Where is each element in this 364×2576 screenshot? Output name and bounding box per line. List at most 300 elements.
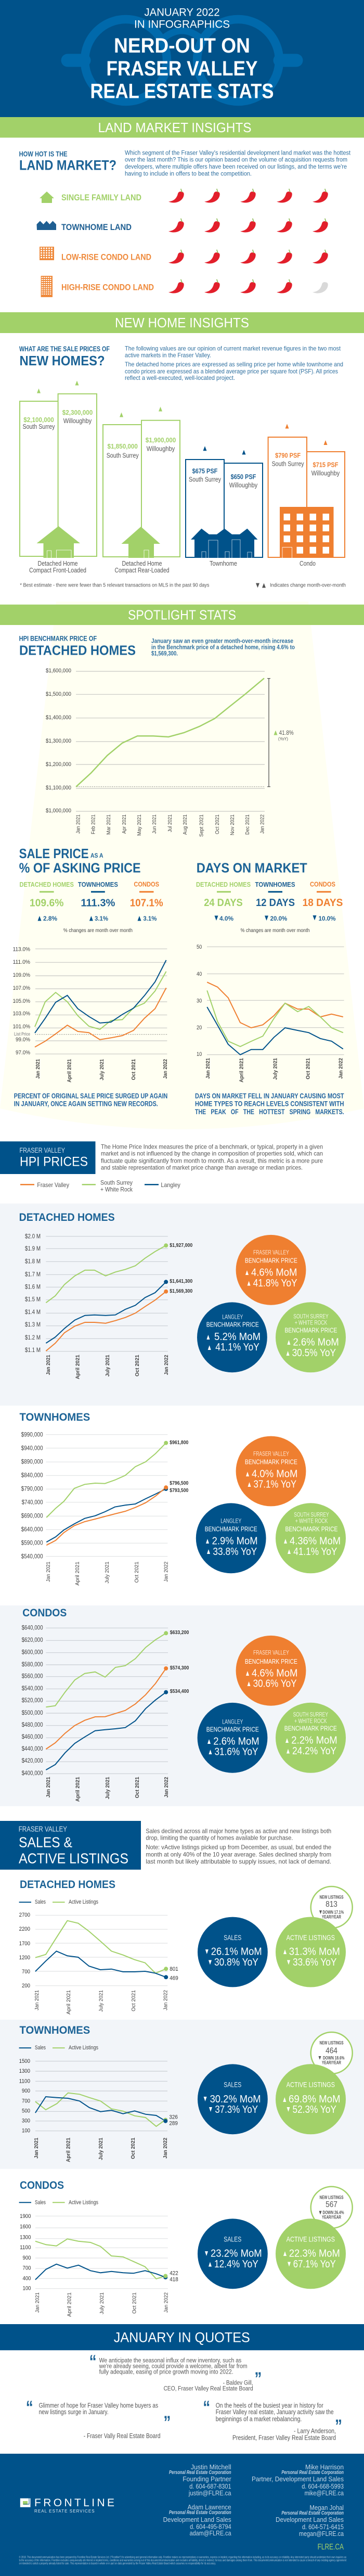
line chart: condo sales: 418 [170, 2276, 178, 2282]
quote: Larry Anderson: “ [203, 2398, 210, 2417]
bubble: fraser valley townhomes: FRASER VALLEY [253, 1451, 289, 1458]
line chart: detached sales: 2700 [19, 1912, 30, 1918]
contact: Megan Johal: Megan Johal [309, 2504, 344, 2511]
line chart: detached HPI: April 2021 [75, 1355, 81, 1379]
line chart: detached sales: 801 [170, 1966, 178, 1972]
line chart: sale price as % of asking: 109.0% [12, 972, 30, 978]
line chart: detached HPI: $1.9 M [25, 1246, 41, 1252]
line chart: condo HPI: $600,000 [22, 1650, 43, 1656]
bubble: active listings townhomes: ACTIVE LISTINGS [287, 2081, 335, 2089]
panel: sales condos: CONDOS [20, 2179, 64, 2191]
line chart: detached benchmark price: $1,200,000 [46, 761, 71, 768]
line chart: detached HPI: $2.0 M [25, 1233, 41, 1240]
contact: Adam Lawrence: Adam Lawrence [188, 2503, 231, 2511]
heading: detached homes benchmark: HPI BENCHMARK PRICE OF [19, 635, 97, 642]
stats: sale price by home type: 107.1% [130, 898, 163, 909]
quote: Fraser Valley Real Estate Board: ” [163, 2413, 171, 2432]
panel heading: sales and active listings [0, 1821, 141, 1870]
heading: land market: LAND MARKET? [19, 157, 116, 173]
logo: frontline [20, 2497, 114, 2514]
line chart: detached sales: April 2021 [66, 1990, 72, 2014]
bubble: langley townhomes: 2.9% MoM [212, 1536, 258, 1547]
text: new homes intro: The detached home prices are expressed as selling price per home while townhome and [125, 361, 343, 368]
quote: Baldev Gill: CEO, Fraser Valley Real Estate Board [164, 2384, 253, 2392]
bubble: sales detached: 30.8% YoY [214, 1957, 258, 1968]
contact: Megan Johal [276, 2504, 344, 2537]
legend: condo sales and listings [19, 2199, 98, 2205]
section band: new home insights: NEW HOME INSIGHTS [115, 315, 249, 330]
title: FRASER VALLEY [106, 57, 258, 80]
bubble: sales townhomes: 30.2% MoM [210, 2094, 261, 2105]
line chart: sale price as % of asking: 113.0% [12, 946, 30, 952]
rating row: low-rise condo land [40, 247, 328, 263]
line chart: detached benchmark price [46, 668, 294, 837]
line chart: detached benchmark price: $1,000,000 [46, 808, 71, 814]
line chart: condo HPI: April 2021 [75, 1777, 81, 1802]
bubble: langley detached: 5.2% MoM [214, 1331, 261, 1343]
line chart: condo sales: 422 [170, 2270, 178, 2276]
bubble: south surrey condos: SOUTH SURREY [293, 1712, 328, 1718]
line chart: detached benchmark price: Apr 2021 [121, 814, 127, 834]
line chart: days on market: Oct 2021 [306, 1058, 311, 1079]
footnotes [20, 583, 346, 588]
legend: sales and listings: Active Listings [69, 1899, 98, 1905]
legend: HPI regions: Fraser Valley [37, 1181, 69, 1189]
line chart: sale price as % of asking: April 2021 [67, 1059, 73, 1082]
bubble: langley townhomes [196, 1503, 266, 1573]
footnotes: Indicates change month-over-month [270, 583, 346, 588]
line chart: condo HPI: $640,000 [22, 1625, 43, 1631]
legend: sales and listings [19, 1899, 98, 1905]
bubble: active listings townhomes: 69.8% MoM [289, 2094, 341, 2105]
panel: HPI townhomes [20, 1411, 346, 1586]
text: new homes intro: active markets in the Fraser Valley. [125, 351, 211, 359]
rating row: townhome land: TOWNHOME LAND [61, 222, 132, 232]
bar group: detached front-loaded [20, 381, 97, 558]
line chart: condo HPI: $460,000 [22, 1734, 43, 1740]
line chart: townhome sales: 1300 [19, 2068, 30, 2074]
rating row: townhome land [36, 219, 328, 232]
stats: sale price by home type: DETACHED HOMES [19, 881, 74, 888]
spotlight background [0, 602, 364, 1129]
bubble: langley condos [198, 1703, 267, 1773]
bubble: new listings detached: DOWN 17.1% [322, 1909, 344, 1915]
legend: condo sales and listings: Sales [35, 2199, 46, 2205]
line chart: days on market: 20 [197, 1025, 202, 1031]
bubble: active listings condos [276, 2218, 346, 2289]
line chart: townhome HPI: $690,000 [21, 1513, 43, 1520]
line chart: townhome HPI: $961,800 [170, 1440, 189, 1446]
bar chart category labels: Compact Front-Loaded [29, 567, 86, 574]
line chart: condo sales: July 2021 [99, 2292, 105, 2314]
stats: sale price by home type: 3.1% [143, 915, 157, 922]
stats: days on market by home type: CONDOS [310, 881, 335, 888]
text: sales intro: month at only 40% of the 10 year average. Sales declined sharply from [146, 1851, 331, 1858]
line chart: condo sales: 700 [23, 2265, 31, 2271]
quote: Larry Anderson: beginnings of a market rebalancing. [216, 2415, 302, 2422]
line chart: detached HPI: $1,927,000 [170, 1243, 193, 1248]
line chart: detached benchmark price: May 2021 [136, 814, 142, 836]
bubble: new listings townhomes: YEAR/YEAR [322, 2060, 341, 2065]
section band: new home insights [0, 312, 364, 333]
panel: HPI townhomes: TOWNHOMES [20, 1411, 90, 1423]
legend: townhome sales and listings [19, 2045, 98, 2051]
bubble: fraser valley condos [236, 1636, 306, 1706]
contact: Justin Mitchell: Founding Partner [183, 2475, 231, 2483]
line chart: detached sales: Oct 2021 [131, 1990, 137, 2011]
bar group: townhome [186, 446, 263, 558]
bubble: south surrey townhomes: SOUTH SURREY [294, 1512, 329, 1519]
line chart: townhome HPI [21, 1432, 189, 1586]
stats: days on market by home type: 10.0% [318, 915, 336, 922]
line chart: detached benchmark price: Feb 2021 [90, 814, 97, 834]
bar chart category labels [29, 560, 316, 574]
contact: Mike Harrison: Partner, Development Land Sales [252, 2475, 344, 2483]
quote: Baldev Gill: - Baldev Gill, [223, 2379, 253, 2386]
text: sales intro: Note: vActive listings picked up from December, as usual, but ended the [146, 1843, 331, 1851]
legend: HPI regions: + White Rock [100, 1185, 133, 1193]
line chart: detached sales: 2200 [19, 1926, 30, 1932]
line chart: detached benchmark price: Jan 2022 [259, 814, 265, 834]
bubble: langley condos: LANGLEY [222, 1719, 243, 1726]
line chart: detached HPI: $1.4 M [25, 1309, 41, 1316]
line chart: townhome sales [19, 2058, 178, 2162]
line chart: detached sales: Jan 2021 [34, 1990, 40, 2010]
line chart: townhome sales: 500 [22, 2108, 30, 2114]
panel: HPI condos: CONDOS [22, 1607, 67, 1619]
contact: Mike Harrison: d. 604-668-5993 [302, 2482, 344, 2490]
caption: sale price [14, 1092, 167, 1107]
bubble: sales condos: SALES [224, 2235, 241, 2243]
line chart: sale price as % of asking: 111.0% [12, 959, 30, 965]
line chart: townhome sales: July 2021 [98, 2137, 104, 2160]
line chart: detached sales: July 2021 [99, 1990, 104, 2012]
line chart: sale price as % of asking: 99.0% [16, 1037, 30, 1043]
panel: HPI detached homes [0, 1204, 364, 1406]
bubble: fraser valley townhomes: 4.0% MoM [252, 1469, 297, 1480]
bar group: detached rear-loaded [103, 407, 180, 558]
bubble: fraser valley condos: BENCHMARK PRICE [245, 1657, 297, 1665]
line chart: townhome sales: Oct 2021 [131, 2137, 136, 2159]
panel: sales condos [19, 2179, 353, 2317]
line chart: townhome HPI: $793,500 [170, 1488, 189, 1494]
panel: sales townhomes: TOWNHOMES [20, 2024, 90, 2036]
quote: Baldev Gill: we're already seeing, could provide a welcome, albeit far from [99, 2363, 248, 2370]
bubble: new listings condos: YEAR/YEAR [322, 2215, 341, 2220]
text: sales intro: last month but likely attributable to supply issues, not lack of demand. [146, 1858, 331, 1865]
bubble: new listings detached: NEW LISTINGS [319, 1895, 343, 1900]
stats: days on market by home type: DETACHED HOMES [196, 881, 251, 888]
line chart: days on market: 40 [197, 971, 202, 977]
line chart: detached HPI: Jan 2021 [46, 1355, 51, 1375]
text: new homes intro: The following values are our opinion of current market revenue figures in the two most [125, 345, 341, 352]
bubble: fraser valley townhomes [236, 1436, 306, 1506]
heading: days on market: DAYS ON MARKET [197, 860, 307, 875]
bubble: active listings condos: ACTIVE LISTINGS [287, 2235, 335, 2243]
stats: days on market by home type: % changes are month over month [240, 927, 310, 934]
stats: sale price by home type: CONDOS [134, 881, 159, 888]
bubble: fraser valley townhomes: BENCHMARK PRICE [245, 1458, 297, 1465]
line chart: detached HPI: $1,641,300 [170, 1279, 193, 1284]
line chart: condo HPI: $500,000 [22, 1710, 43, 1716]
panel: HPI condos [0, 1605, 364, 1806]
heading: sale price as % of asking: AS A [90, 852, 103, 859]
line chart: sale price as % of asking: 105.0% [12, 998, 30, 1004]
line chart: townhome HPI: Oct 2021 [134, 1561, 140, 1583]
line chart: townhome HPI: $890,000 [21, 1459, 43, 1465]
line chart: condo HPI: $440,000 [22, 1746, 43, 1752]
bubble: south surrey townhomes: + WHITE ROCK [295, 1519, 328, 1525]
text: sales intro [146, 1827, 331, 1865]
bubble: south surrey condos: 2.2% MoM [291, 1735, 337, 1746]
bubble: new listings condos [311, 2187, 353, 2228]
bar chart category labels: Condo [300, 560, 316, 567]
bar group: detached front-loaded: $2,300,000 [62, 409, 93, 416]
line chart: townhome sales: Jan 2021 [34, 2137, 40, 2159]
section band: land market insights [0, 117, 364, 137]
line chart: days on market: 50 [197, 944, 202, 950]
line chart: townhome sales: 700 [22, 2098, 30, 2104]
line chart: condo HPI: $560,000 [22, 1674, 43, 1680]
line chart: townhome sales: April 2021 [66, 2137, 72, 2162]
stats: days on market by home type: 18 DAYS [303, 897, 343, 909]
panel: sales detached homes [19, 1879, 353, 2014]
bubble: sales condos: 23.2% MoM [211, 2248, 262, 2260]
legend: condo sales and listings: Active Listings [69, 2199, 98, 2205]
bubble: south surrey condos: BENCHMARK PRICE [284, 1725, 337, 1732]
bar group: townhome: $650 PSF [231, 473, 256, 481]
line chart: townhome sales: Jan 2022 [163, 2137, 168, 2159]
line chart: detached benchmark price: 41.8% [279, 730, 294, 736]
bubble: active listings condos: 22.3% MoM [289, 2248, 340, 2260]
stats: sale price by home type: 111.3% [81, 898, 115, 909]
line chart: detached benchmark price: $1,100,000 [46, 785, 71, 791]
bar group: detached front-loaded: South Surrey [23, 423, 55, 430]
line chart: condo HPI: Oct 2021 [135, 1777, 140, 1798]
line chart: detached sales: 700 [22, 1969, 30, 1975]
line chart: condo HPI [22, 1625, 189, 1802]
title: NERD-OUT ON [114, 34, 250, 57]
heading: sale price as % of asking: % OF ASKING PRICE [19, 860, 141, 875]
quote: Baldev Gill: fully adequate, easing of price growth moving into 2022. [99, 2368, 233, 2376]
line chart: condo HPI: $620,000 [22, 1637, 43, 1643]
quote: Larry Anderson: President, Fraser Valley Real Estate Board [232, 2434, 336, 2441]
line chart: townhome sales: 326 [169, 2114, 178, 2120]
contact: Adam Lawrence: adam@FLRE.ca [190, 2529, 231, 2537]
bubble: new listings detached [311, 1886, 353, 1928]
line chart: condo sales: 400 [23, 2275, 31, 2281]
stats: sale price by home type: % changes are month over month [63, 927, 133, 934]
bar chart category labels: Townhome [210, 560, 237, 567]
line chart: condo HPI: $520,000 [22, 1698, 43, 1704]
line chart: detached sales: 1200 [19, 1955, 30, 1961]
line chart: sale price as % of asking: Jan 2022 [163, 1059, 168, 1079]
line chart: detached sales [19, 1912, 178, 2014]
bubble: sales condos [198, 2218, 268, 2289]
line chart: days on market [197, 944, 344, 1082]
line chart: condo sales: 1300 [20, 2235, 31, 2241]
line chart: condo HPI: $420,000 [22, 1758, 43, 1764]
text: HPI intro: market and is not influenced by the change in composition of properties sold, which can [101, 1150, 323, 1157]
line chart: townhome HPI: $790,000 [21, 1486, 43, 1493]
bubble: new listings detached: YEAR/YEAR [322, 1915, 341, 1920]
line chart: condo sales: 900 [23, 2255, 31, 2261]
bar group: detached rear-loaded: Willoughby [147, 445, 175, 452]
stats: days on market by home type: 24 DAYS [204, 897, 243, 909]
panel: sales townhomes [0, 2020, 364, 2169]
bar group: detached rear-loaded: $1,850,000 [107, 443, 138, 450]
line chart: townhome HPI: $990,000 [21, 1432, 43, 1438]
bubble: south surrey detached: SOUTH SURREY [293, 1314, 329, 1320]
bubble: south surrey detached: 30.5% YoY [292, 1347, 336, 1359]
rating row: high-rise condo land [41, 276, 328, 297]
bubble: active listings detached: ACTIVE LISTINGS [287, 1933, 335, 1942]
stats: sale price by home type [19, 881, 163, 934]
bubble: new listings townhomes: NEW LISTINGS [319, 2041, 343, 2046]
bar group: townhome: South Surrey [189, 476, 222, 483]
website: FLRE.CA [318, 2543, 344, 2552]
bubble: sales detached: SALES [224, 1933, 241, 1942]
quote: Larry Anderson: ” [335, 2416, 342, 2436]
section band: january in quotes: JANUARY IN QUOTES [114, 2330, 250, 2345]
bubble: langley townhomes: LANGLEY [220, 1519, 241, 1525]
line chart: detached HPI [25, 1233, 193, 1379]
bubble: langley townhomes: 33.8% YoY [213, 1546, 257, 1558]
text: benchmark intro [151, 637, 295, 657]
bubble: fraser valley townhomes: 37.1% YoY [254, 1479, 296, 1490]
quote: Larry Anderson [203, 2398, 342, 2441]
line chart: condo HPI: $534,400 [170, 1689, 189, 1694]
line chart: townhome sales: 100 [22, 2127, 30, 2134]
text: benchmark intro: January saw an even greater month-over-month increase [151, 637, 293, 645]
panel heading: sales and active listings: FRASER VALLEY [19, 1825, 67, 1833]
quote: Baldev Gill [89, 2352, 262, 2392]
line chart: condo HPI: $480,000 [22, 1722, 43, 1728]
bubble: sales townhomes: 37.3% YoY [215, 2104, 258, 2115]
rating row: low-rise condo land: LOW-RISE CONDO LAND [61, 252, 151, 262]
quote: Baldev Gill: “ [89, 2352, 97, 2371]
line chart: townhome sales: 300 [22, 2118, 30, 2124]
stats: sale price by home type: TOWNHOMES [78, 881, 118, 888]
text: HPI intro: and stable representation of market price change than average or median prices. [101, 1164, 303, 1171]
contact: Justin Mitchell: d. 604-687-8301 [189, 2482, 231, 2490]
text: new homes intro: condo prices are expressed as a blended average price per square foot (PSF). All prices [125, 367, 338, 375]
rating row: high-rise condo land: HIGH-RISE CONDO LAND [61, 282, 154, 292]
line chart: detached HPI: $1.6 M [25, 1284, 41, 1291]
title: JANUARY 2022 [145, 6, 219, 19]
logo: frontline: REAL ESTATE SERVICES [34, 2509, 95, 2514]
bubble: south surrey townhomes: 4.36% MoM [290, 1536, 341, 1547]
heading: sale price as % of asking: SALE PRICE [19, 846, 89, 861]
line chart: detached HPI: July 2021 [105, 1355, 111, 1376]
text: land market intro [125, 150, 351, 177]
bubble: fraser valley detached: FRASER VALLEY [253, 1250, 289, 1256]
line chart: condo sales: 1100 [20, 2245, 31, 2251]
legend: HPI regions [20, 1179, 180, 1193]
caption: days on market [195, 1092, 344, 1116]
bubble: fraser valley condos: FRASER VALLEY [253, 1650, 289, 1656]
line chart: sale price as % of asking: 101.0% [12, 1024, 30, 1030]
line chart: townhome HPI: $740,000 [22, 1500, 43, 1506]
line chart: townhome sales: 1500 [19, 2058, 30, 2064]
text: sales intro: Sales declined across all major home types as active and new listings both [146, 1827, 331, 1834]
bar chart category labels: Compact Rear-Loaded [114, 567, 170, 574]
line chart: detached benchmark price: Dec 2021 [244, 814, 251, 835]
bubble: sales detached [198, 1917, 268, 1987]
bubble: langley condos: 31.6% YoY [214, 1746, 258, 1758]
line chart: condo sales [20, 2213, 178, 2317]
line chart: detached benchmark price: $1,300,000 [46, 738, 71, 744]
line chart: detached benchmark price: Oct 2021 [214, 814, 220, 834]
header banner [0, 0, 364, 117]
bubble: south surrey townhomes: BENCHMARK PRICE [285, 1525, 338, 1533]
contact: Mike Harrison: Personal Real Estate Corporation [281, 2470, 344, 2476]
rating row: single family land: SINGLE FAMILY LAND [61, 193, 141, 202]
footer [0, 2454, 364, 2576]
line chart: sale price as % of asking: 103.0% [12, 1011, 30, 1017]
quote: Larry Anderson: - Larry Anderson, [294, 2428, 336, 2435]
line chart: condo HPI: $540,000 [22, 1686, 43, 1692]
line chart: townhome HPI: $540,000 [21, 1554, 43, 1560]
stats: days on market by home type: 4.0% [219, 915, 233, 922]
quote: Fraser Valley Real Estate Board: new listings surge in January. [39, 2408, 109, 2416]
line chart: detached sales: 469 [170, 1975, 178, 1981]
rating row: single family land [40, 188, 328, 203]
legend: townhome sales and listings: Active Listings [69, 2045, 98, 2051]
bubble: langley detached [197, 1302, 267, 1372]
bubble: new listings condos: 567 [326, 2200, 337, 2209]
line chart: detached HPI: $1.7 M [25, 1272, 41, 1278]
legend: HPI regions: Langley [161, 1181, 180, 1189]
bubble: south surrey condos: 24.2% YoY [292, 1745, 336, 1757]
line chart: condo HPI: $580,000 [22, 1662, 43, 1668]
contact: Megan Johal: Development Land Sales [276, 2516, 344, 2523]
line chart: townhome HPI: $840,000 [21, 1473, 43, 1479]
line chart: detached benchmark price: Mar 2021 [106, 814, 112, 835]
bubble: langley condos: BENCHMARK PRICE [206, 1726, 259, 1733]
text: land market intro: over the last month? This is our opinion based on the volume of acquisition requests from [125, 157, 347, 163]
line chart: townhome sales: 900 [22, 2088, 30, 2094]
bubble: active listings detached: 31.3% MoM [289, 1946, 340, 1958]
line chart: condo HPI: Jan 2021 [46, 1777, 51, 1797]
line chart: townhome HPI: $640,000 [21, 1527, 43, 1533]
line chart: days on market: July 2021 [272, 1058, 279, 1080]
contact: Adam Lawrence: d. 604-495-8794 [190, 2523, 231, 2530]
stats: days on market by home type: 20.0% [270, 915, 288, 922]
line chart: detached HPI: $1.8 M [25, 1258, 41, 1265]
bubble: new listings condos: DOWN 26.4% [322, 2210, 344, 2215]
contact: Adam Lawrence: Development Land Sales [163, 2516, 231, 2523]
title: REAL ESTATE STATS [90, 80, 274, 103]
bubble: south surrey condos [276, 1703, 346, 1773]
quote: Fraser Valley Real Estate Board: - Fraser Vally Real Estate Board [84, 2432, 161, 2440]
panel: sales detached homes: DETACHED HOMES [20, 1879, 115, 1891]
bubble: sales detached: 26.1% MoM [211, 1946, 262, 1958]
legend: sales and listings: Sales [35, 1899, 46, 1905]
bar group: condo: Willoughby [311, 469, 340, 477]
line chart: condo HPI: $400,000 [22, 1770, 43, 1777]
bubble: south surrey detached: + WHITE ROCK [295, 1320, 327, 1327]
line chart: days on market: 30 [197, 998, 202, 1004]
line chart: townhome HPI: July 2021 [105, 1561, 110, 1584]
contact: Megan Johal: Personal Real Estate Corporation [281, 2510, 344, 2516]
line chart: sale price as % of asking: List Price [14, 1031, 30, 1037]
quote: Baldev Gill: We anticipate the seasonal influx of new inventory, such as [99, 2357, 241, 2364]
contact: Megan Johal: megan@FLRE.ca [299, 2530, 344, 2537]
bar group: condo: $715 PSF [313, 461, 339, 468]
stats: sale price by home type: 109.6% [30, 898, 64, 909]
quote: Larry Anderson: On the heels of the busiest year in history for [216, 2402, 323, 2409]
